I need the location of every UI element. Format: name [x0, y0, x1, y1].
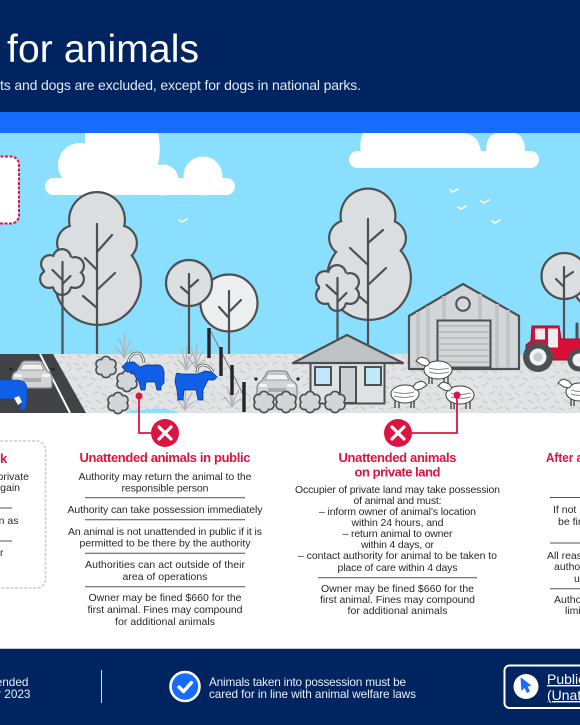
fence: [209, 328, 244, 412]
icon: cursor: [514, 674, 538, 699]
large tree left: [54, 191, 142, 363]
heading private land: on private land: [354, 464, 441, 480]
small tree left: [39, 248, 85, 354]
blue divider band: [0, 112, 580, 133]
cloud left: [45, 133, 235, 196]
rules public: area of operations: [122, 571, 208, 583]
rules private land: – return animal to owner: [342, 528, 453, 540]
rules right column: autho: [554, 561, 580, 573]
illustrated landscape scene: [0, 133, 580, 433]
heading private land: [338, 450, 456, 480]
red dashed callout box: [0, 156, 19, 224]
panel: unattended animals on private land: [295, 450, 500, 617]
rules private land: – contact authority for animal to be taken to: [298, 550, 497, 562]
left box text: r: [0, 547, 4, 559]
rules right column: If not: [553, 504, 576, 516]
car by house: [254, 371, 300, 398]
rules private land: [295, 484, 500, 617]
rules private land: for additional animals: [348, 605, 448, 617]
road: [0, 354, 86, 413]
rules private land: – inform owner of animal’s location: [319, 506, 476, 518]
sky: [0, 133, 580, 354]
small tree centre: [315, 264, 360, 340]
rules public: responsible person: [122, 482, 209, 494]
left box heading: k: [0, 451, 8, 466]
reed tufts: [116, 334, 241, 410]
left box text: [0, 471, 29, 559]
blue cow: [0, 380, 27, 410]
house: [293, 335, 403, 404]
rules private land: of animal and must:: [354, 495, 442, 507]
animal welfare note: [209, 675, 416, 701]
heading private land: Unattended animals: [338, 450, 456, 465]
rules public: Owner may be fined $660 for the: [88, 592, 242, 604]
rules private land: Owner may be fined $660 for the: [321, 583, 474, 595]
heading public: Unattended animals in public: [80, 450, 250, 465]
animal welfare note: cared for in line with animal welfare laws: [209, 687, 416, 701]
birds: [179, 189, 500, 223]
footer left note: [0, 675, 31, 701]
icon: red cross private land: [384, 419, 412, 447]
rules public: first animal. Fines may compound: [88, 604, 243, 616]
panel: right column cropped: [546, 450, 580, 617]
pointer: private land: [412, 392, 460, 433]
rules private land: within 4 days, or: [360, 539, 434, 551]
ground: [0, 354, 580, 413]
panel: left dashed box: [0, 441, 46, 588]
rules public: Authority can take possession immediately: [68, 504, 263, 516]
icon: blue check: [170, 672, 200, 701]
footer band: [0, 648, 580, 725]
rules private land: place of care within 4 days: [338, 562, 458, 574]
rules private land: Occupier of private land may take possession: [295, 484, 500, 496]
header band: [0, 0, 580, 112]
sheep group: [391, 357, 580, 409]
red tractor: [523, 324, 580, 372]
shrubs: [95, 356, 346, 414]
subtitle: ts and dogs are excluded, except for dogs in national parks.: [0, 77, 361, 93]
pointer: public: [136, 392, 153, 433]
blue goat right: [175, 365, 217, 400]
round tree right: [542, 253, 580, 340]
rules public: Authority may return the animal to the: [78, 471, 252, 483]
rules right column: [547, 498, 580, 617]
rules public: Authorities can act outside of their: [85, 559, 246, 571]
large tree centre: [326, 188, 412, 355]
link button: [504, 666, 580, 708]
round trees centre: [166, 260, 258, 360]
rules private land: first animal. Fines may compound: [320, 594, 475, 606]
blue goat left: [122, 353, 164, 390]
car on road: [9, 361, 55, 388]
title: for animals: [7, 28, 199, 71]
rules right column: u: [574, 573, 580, 585]
rules private land: within 24 hours, and: [350, 517, 444, 529]
rules public: An animal is not unattended in public if it is: [68, 526, 262, 538]
panel: unattended animals in public: [68, 450, 263, 628]
link text: [547, 671, 580, 703]
pond: [125, 408, 180, 413]
barn: [409, 284, 519, 369]
rules public: for additional animals: [115, 616, 215, 628]
icon: red cross public: [151, 419, 179, 447]
animal welfare note: Animals taken into possession must be: [209, 675, 406, 689]
rules public: permitted to be there by the authority: [80, 538, 251, 550]
cloud right: [349, 133, 539, 168]
rules public: [68, 471, 263, 628]
